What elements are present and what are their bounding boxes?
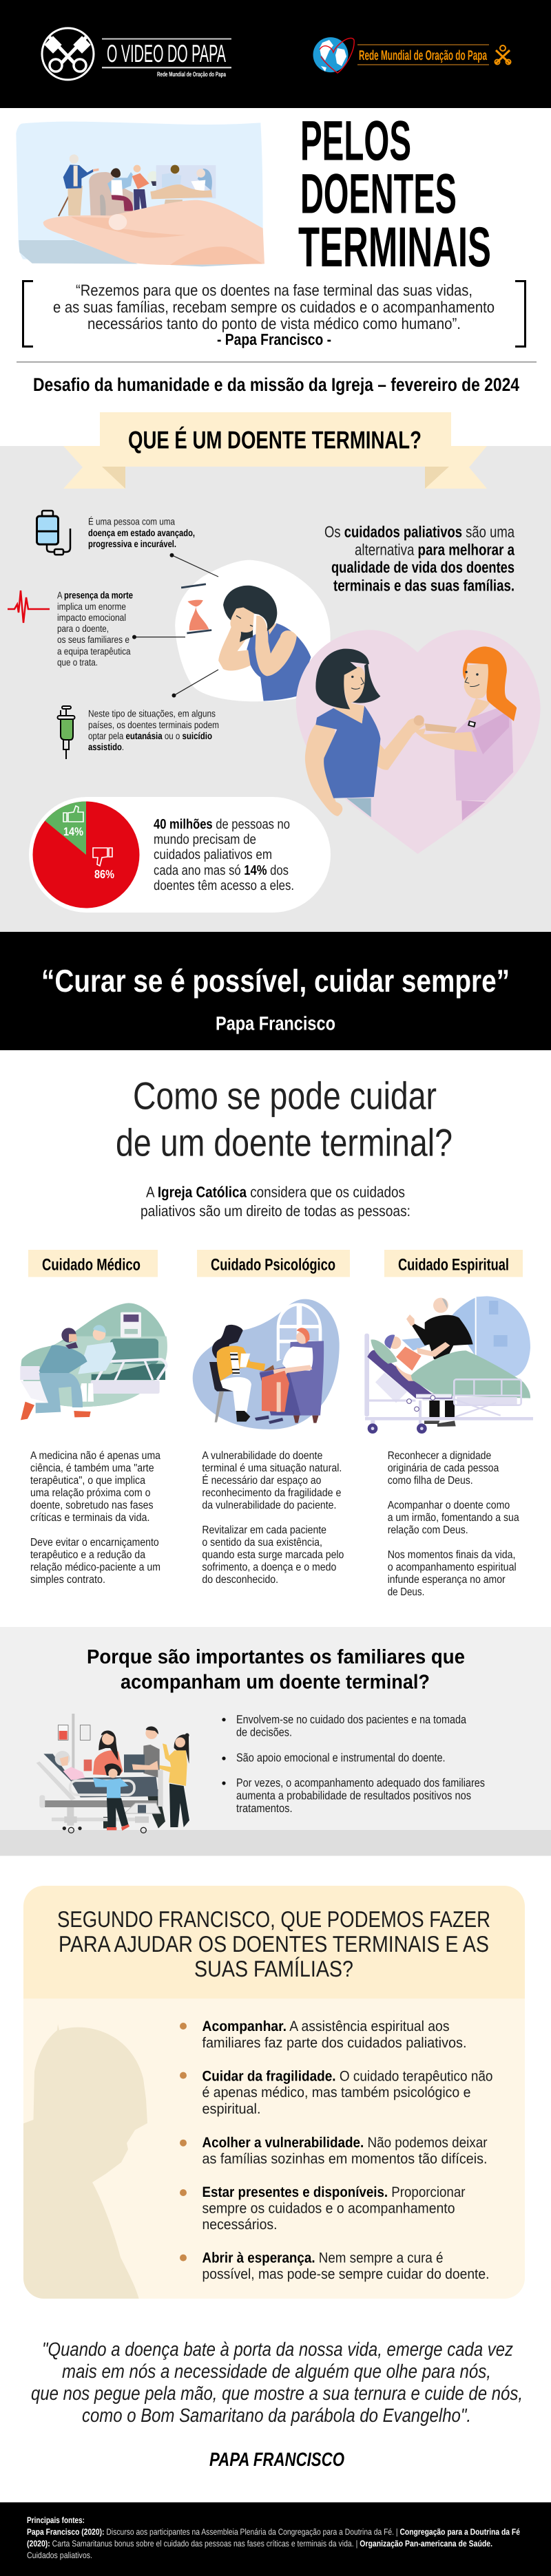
text: psychological: A vulnerabilidade do doente xyxy=(202,1450,322,1462)
list: what we can do: as famílias sozinhas em momentos tão difíceis. xyxy=(202,2151,488,2167)
heading: how to care: de um doente terminal? xyxy=(116,1120,453,1164)
text: presence of death: os seus familiares e xyxy=(57,634,129,645)
banner heading: QUE É UM DOENTE TERMINAL? xyxy=(128,425,422,454)
icon: heartbeat xyxy=(8,590,50,623)
text: euthanasia: Neste tipo de situações, em alguns xyxy=(88,708,216,719)
text: spiritual: infunde esperança no amor xyxy=(388,1574,506,1586)
column: psychological care xyxy=(193,1250,350,1586)
prayer intention quote with brackets: e as suas famílias, recebam sempre os cuidados e o acompanhamento xyxy=(53,298,495,316)
list: family roles xyxy=(222,1713,485,1815)
footer: sources: Cuidados paliativos. xyxy=(27,2551,92,2560)
list: what we can do: Estar presentes e disponíveis. Proporcionar xyxy=(202,2184,466,2200)
prayer intention quote with brackets: necessários tanto do ponto de vista médico como humano”. xyxy=(87,315,461,332)
prayer intention quote with brackets: “Rezemos para que os doentes na fase terminal das suas vidas, xyxy=(76,281,472,299)
text: psychological: do desconhecido. xyxy=(202,1574,278,1586)
list: what we can do xyxy=(180,2019,493,2282)
prayer intention quote with brackets xyxy=(23,281,525,348)
heart: caring for the patient xyxy=(296,630,541,854)
text: medical xyxy=(30,1450,160,1586)
heading xyxy=(57,1906,490,1981)
text: spiritual: Acompanhar o doente como xyxy=(388,1500,510,1511)
heading: PARA AJUDAR OS DOENTES TERMINAIS E AS xyxy=(59,1931,489,1957)
list: what we can do: familiares faz parte dos cuidados paliativos. xyxy=(202,2035,467,2051)
list: family roles: Envolvem-se no cuidado dos pacientes e na tomada xyxy=(236,1713,466,1726)
text: euthanasia: optar pela eutanásia ou o suicídio xyxy=(88,730,212,741)
text: psychological: da vulnerabilidade do paciente. xyxy=(202,1500,336,1511)
text: psychological: reconhecimento da fragilidade e xyxy=(202,1487,341,1499)
quote band: Papa Francisco xyxy=(216,1012,335,1034)
pie chart xyxy=(33,801,139,908)
text: presence of death xyxy=(57,590,133,668)
text: psychological: Revitalizar em cada paciente xyxy=(202,1524,326,1536)
list: what we can do: é apenas médico, mas também psicológico e xyxy=(202,2085,471,2100)
tag: Cuidado Psicológico xyxy=(211,1256,335,1275)
column: spiritual care xyxy=(364,1250,533,1598)
text: psychological: quando esta surge marcada pelo xyxy=(202,1549,344,1561)
text: 40 million: 40 milhões de pessoas no xyxy=(154,817,290,832)
blob: sad patient xyxy=(175,560,541,854)
main title xyxy=(298,110,491,279)
text: psychological xyxy=(202,1450,344,1586)
text: medical: simples contrato. xyxy=(30,1574,105,1586)
prayer intention quote with brackets: - Papa Francisco - xyxy=(217,330,331,348)
text: medical: Deve evitar o encarniçamento xyxy=(30,1537,159,1548)
heading xyxy=(87,1646,465,1694)
text: presence of death: implica um enorme xyxy=(57,601,126,612)
logo: O Video do Papa: Rede Mundial de Oração do Papa xyxy=(157,71,226,78)
text: palliative care: Os cuidados paliativos são uma xyxy=(324,523,514,541)
section: what is a terminal patient xyxy=(0,412,551,932)
text: definition xyxy=(88,516,195,549)
panel: statistics pie xyxy=(29,797,331,913)
pie chart: 86% xyxy=(94,868,114,881)
list: what we can do: Acompanhar. A assistência espiritual aos xyxy=(202,2019,449,2034)
text: palliative care: alternativa para melhorar a xyxy=(355,541,514,559)
text: 40 million: doentes têm acesso a eles. xyxy=(154,878,294,893)
logo: O Video do Papa: O VIDEO DO PAPA xyxy=(107,39,226,67)
text: spiritual: Nos momentos finais da vida, xyxy=(388,1549,515,1561)
list: what we can do: sempre os cuidados e o acompanhamento xyxy=(202,2201,455,2217)
text: medical: ciência, é também uma "arte xyxy=(30,1462,154,1474)
text: 40 million: mundo precisam de xyxy=(154,832,256,847)
footer: sources xyxy=(0,2502,551,2576)
text: presence of death: para o doente, xyxy=(57,623,109,634)
text: medical: críticas e terminais da vida. xyxy=(30,1512,150,1524)
tag: Cuidado Espiritual xyxy=(398,1256,509,1275)
text: euthanasia: países, os doentes terminais podem xyxy=(88,719,219,730)
main title: PELOS xyxy=(300,110,411,172)
text: medical: A medicina não é apenas uma xyxy=(30,1450,160,1462)
heading: acompanham um doente terminal? xyxy=(121,1672,430,1694)
silhouette of Pope Francis xyxy=(21,2024,147,2302)
header band xyxy=(0,0,551,108)
list: family roles: de decisões. xyxy=(236,1726,292,1738)
closing quote: PAPA FRANCISCO xyxy=(209,2449,344,2470)
heading: Porque são importantes os familiares que xyxy=(87,1646,465,1668)
pie chart: 14% xyxy=(63,825,83,838)
icon: IV bag xyxy=(37,511,70,555)
banner heading xyxy=(63,412,487,489)
footer: sources: Principais fontes: xyxy=(27,2515,85,2525)
list: what we can do: possível, mas pode-se sempre cuidar do doente. xyxy=(202,2266,489,2282)
text: presence of death: que o trata. xyxy=(57,657,98,668)
footer: sources: Papa Francisco (2020): Discurso aos participantes na Assembleia Plenária da Congregação para a Doutrina da Fé. | Congregação para a Doutrina da Fé xyxy=(27,2527,520,2537)
closing quote xyxy=(31,2339,523,2470)
list: what we can do: Abrir à esperança. Nem sempre a cura é xyxy=(202,2250,444,2266)
footer: sources: (2020): Carta Samaritanus bonus sobre el cuidado das pessoas nas fases críticas e terminais da vida. | Organização Pan-americana de Saúde. xyxy=(27,2539,492,2548)
intro text xyxy=(141,1184,410,1220)
text: medical: uma relação próxima com o xyxy=(30,1487,151,1499)
text: spiritual: a um irmão, fomentando a sua xyxy=(388,1512,519,1524)
text: spiritual: originária de cada pessoa xyxy=(388,1462,499,1474)
text: medical: relação médico-paciente a um xyxy=(30,1562,160,1573)
text: medical: terapêutico e a redução da xyxy=(30,1549,145,1561)
list: family roles: São apoio emocional e instrumental do doente. xyxy=(236,1752,446,1765)
illustration: family around bed xyxy=(37,1714,189,1833)
logo: O Video do Papa xyxy=(42,28,231,80)
text: euthanasia xyxy=(88,708,219,752)
text: presence of death: a equipa terapêutica xyxy=(57,646,131,657)
hero illustration: family in a hand xyxy=(16,122,264,266)
text: presence of death: impacto emocional xyxy=(57,612,126,623)
text: 40 million: cada ano mas só 14% dos xyxy=(154,863,289,878)
text: psychological: o sentido da sua existência, xyxy=(202,1537,322,1548)
text: spiritual xyxy=(388,1450,519,1598)
list: family roles: aumenta a probabilidade de resultados positivos nos xyxy=(236,1789,471,1802)
text: medical: terapêutica", o que implica xyxy=(30,1475,145,1487)
pointer lines xyxy=(132,553,218,698)
closing quote: mais em nós a necessidade de alguém que olhe para nós, xyxy=(62,2361,491,2382)
text: spiritual: de Deus. xyxy=(388,1586,424,1598)
text: definition: É uma pessoa com uma xyxy=(88,516,175,527)
text: 40 million xyxy=(154,817,294,893)
list: what we can do: Acolher a vulnerabilidade. Não podemos deixar xyxy=(202,2135,488,2151)
section: family members xyxy=(0,1627,551,1856)
text: psychological: É necessário dar espaço ao xyxy=(202,1474,321,1487)
text: definition: progressiva e incurável. xyxy=(88,538,176,549)
tag xyxy=(384,1250,523,1277)
logo: Rede Mundial de Oração do Papa xyxy=(313,37,511,73)
intro text: A Igreja Católica considera que os cuidados xyxy=(146,1184,405,1201)
text: euthanasia: assistido. xyxy=(88,741,124,752)
illustration: doctor and patient xyxy=(20,1303,167,1420)
text: spiritual: Reconhecer a dignidade xyxy=(388,1450,491,1462)
icon: syringe xyxy=(58,706,74,759)
heading: how to care: Como se pode cuidar xyxy=(133,1074,437,1118)
tag: Cuidado Médico xyxy=(42,1256,141,1275)
text: definition: doença em estado avançado, xyxy=(88,527,195,538)
text: psychological: sofrimento, a doença e o medo xyxy=(202,1562,336,1573)
closing quote: como o Bom Samaritano da parábola do Evangelho". xyxy=(82,2405,471,2426)
text: psychological: terminal é uma situação natural. xyxy=(202,1462,342,1474)
list: family roles: Por vezes, o acompanhamento adequado dos familiares xyxy=(236,1776,485,1789)
text: spiritual: como filha de Deus. xyxy=(388,1475,473,1487)
tag xyxy=(197,1250,350,1277)
intro text: paliativos são um direito de todas as pessoas: xyxy=(141,1202,410,1220)
text: spiritual: relação com Deus. xyxy=(388,1524,468,1536)
heading: SUAS FAMÍLIAS? xyxy=(194,1956,353,1981)
list: what we can do: necessários. xyxy=(202,2217,277,2233)
illustration: priest and patient in bed xyxy=(364,1296,533,1434)
illustration: therapist and patient xyxy=(193,1299,340,1429)
column: medical care xyxy=(20,1250,167,1586)
quote band xyxy=(0,932,551,1050)
tag xyxy=(28,1250,158,1277)
text: palliative care: terminais e das suas famílias. xyxy=(333,577,514,595)
panel: according to Francis xyxy=(21,1886,525,2302)
list: family roles: tratamentos. xyxy=(236,1802,293,1815)
text: presence of death: A presença da morte xyxy=(57,590,133,601)
heading: how to care xyxy=(116,1074,453,1164)
list: what we can do: Cuidar da fragilidade. O cuidado terapêutico não xyxy=(202,2069,493,2085)
text: palliative care xyxy=(324,523,514,595)
text: medical: doente, sobretudo nas fases xyxy=(30,1500,154,1511)
list: what we can do: espiritual. xyxy=(202,2101,260,2117)
text: 40 million: cuidados paliativos em xyxy=(154,847,272,862)
text: spiritual: o acompanhamento espiritual xyxy=(388,1562,517,1573)
